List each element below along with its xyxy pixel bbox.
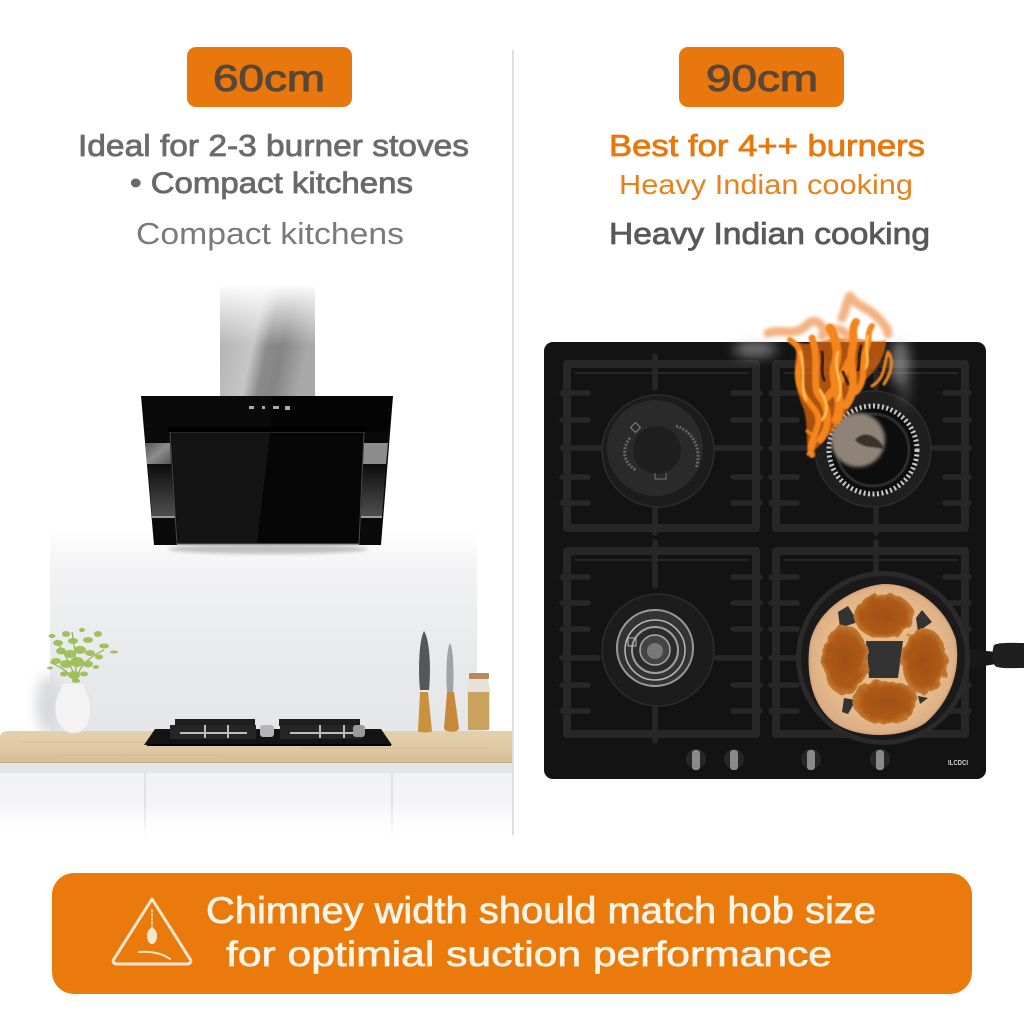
badge: 60cm [187,47,352,107]
badge: 90cm: 90cm [706,58,818,99]
gas hob small [144,719,392,745]
white fade bottom [0,805,512,840]
chimney duct [220,284,315,396]
lower cabinets [0,763,512,838]
burner: top left [602,395,714,507]
frying pan with food [796,571,1024,745]
text: compact kitchens: Compact kitchens [136,216,404,251]
steel bands [145,443,171,464]
panel: 60cm header [78,47,469,251]
spice jar [467,673,490,731]
chimney hood [141,396,393,545]
text: compact kitchens bullet: • Compact kitchens [130,167,413,200]
badge: 90cm [679,47,844,107]
countertop [0,731,512,762]
grate: top right [771,356,969,533]
plant shadow [36,675,60,735]
food gaps [838,606,932,714]
grate: bottom right [771,542,969,734]
grate: top left [562,356,760,533]
orange tongues [790,322,891,455]
grate: bottom left [562,542,760,741]
column divider [512,50,514,835]
hood shadow [168,544,368,554]
glass front panel [170,432,364,544]
brand mark: ILCDCI [948,760,968,767]
yellow flame cores [800,336,868,420]
vase [55,683,91,733]
text: heavy indian cooking orange: Heavy Indian cooking [619,169,913,200]
food crust [810,585,956,734]
text: best for 4++ burners: Best for 4++ burners [609,128,925,163]
burner: bottom left [602,594,714,706]
hob plate [544,342,986,779]
dark gaps between flames [822,346,861,384]
pale flame tips [768,296,888,336]
panel: 90cm gas hob [544,296,1024,779]
badge: 60cm: 60cm [213,58,325,99]
utensil [444,643,459,732]
callout: chimney width tip [52,873,972,994]
flame body [795,338,886,456]
pan handle [960,643,1024,670]
panel: 60cm kitchen scene [0,284,512,840]
panel: 90cm header [609,47,930,251]
control knobs [686,749,890,770]
food lumps [822,593,947,724]
text: callout line 1: Chimney width should match hob size [206,890,876,931]
smoke [733,338,910,406]
icon: warning triangle [113,899,191,964]
text: heavy indian cooking: Heavy Indian cooking [609,216,930,251]
burner: top right lit [815,391,931,507]
knife [418,631,432,732]
backsplash wall [50,530,477,735]
text: ideal for 2-3 burner stoves: Ideal for 2-3 burner stoves [78,128,469,163]
side glass reflections [148,464,175,516]
touch controls [249,406,290,410]
plant [47,628,118,684]
text: callout line 2: for optimial suction performance [226,935,832,974]
flames [768,296,891,456]
